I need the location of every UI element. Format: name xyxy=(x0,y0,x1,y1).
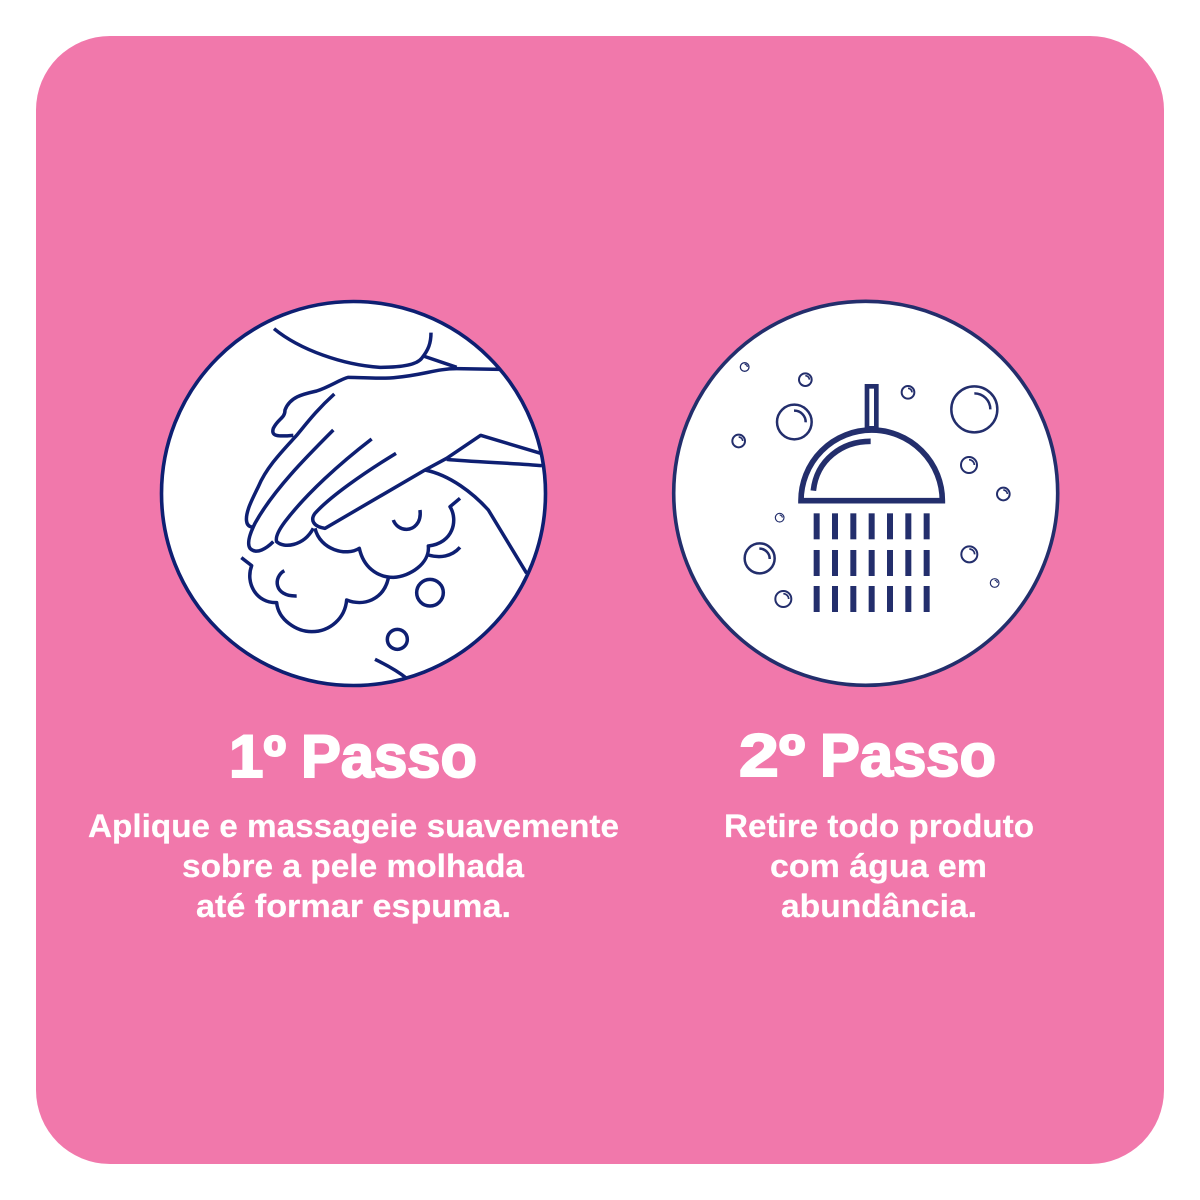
text block: step 1 instructions xyxy=(88,808,619,924)
heading: step 1: 1º xyxy=(229,723,286,790)
heading: step 2: 2º xyxy=(739,722,805,789)
text block: step 1 instructions: Aplique e massageie suavemente xyxy=(88,808,619,844)
text block: step 2 instructions: Retire todo produto xyxy=(724,808,1034,844)
text block: step 1 instructions: sobre a pele molhada xyxy=(182,848,524,884)
heading: step 2: Passo xyxy=(820,722,996,789)
text block: step 2 instructions xyxy=(724,808,1034,924)
icon: soap bubbles xyxy=(732,363,1010,607)
text block: step 2 instructions: abundância. xyxy=(781,888,977,924)
text block: step 2 instructions: com água em xyxy=(770,848,987,884)
panel: step 2 circle illustration xyxy=(674,301,1058,685)
icon: shower head xyxy=(801,386,942,612)
text block: step 1 instructions: até formar espuma. xyxy=(196,888,511,924)
icon: hands massaging foam xyxy=(241,329,542,678)
heading: step 1: Passo xyxy=(301,723,477,790)
panel: step 1 circle illustration xyxy=(162,302,546,686)
